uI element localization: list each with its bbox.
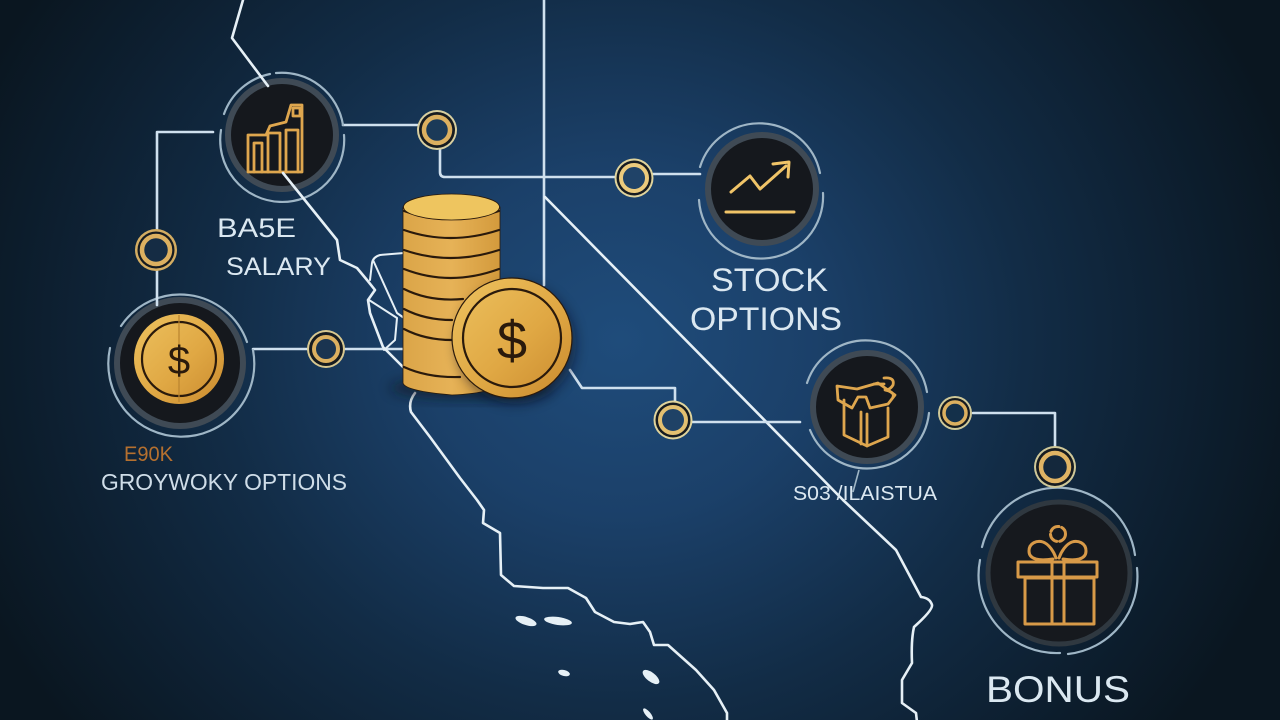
connector: left circle to node bbox=[253, 348, 307, 350]
connector: node to coin stack bbox=[345, 348, 404, 350]
coast line lower bbox=[410, 393, 727, 720]
label: small orange value: E90K bbox=[124, 443, 173, 466]
node bbox=[307, 330, 345, 368]
panel: growth options circle bbox=[108, 294, 254, 437]
panel: sign-on circle bbox=[807, 340, 929, 492]
top border line bbox=[232, 0, 268, 86]
node bbox=[417, 110, 457, 150]
node bbox=[1034, 446, 1076, 488]
node bbox=[614, 158, 654, 198]
front coin bbox=[452, 278, 572, 398]
connector: salary to node bbox=[343, 124, 418, 126]
coast islands bbox=[514, 614, 662, 720]
map outline and connector lines bbox=[157, 0, 1055, 720]
label: garbled sign-on: S03 /ILAISTUA bbox=[793, 483, 938, 505]
connector: coin to lower node bbox=[570, 370, 675, 402]
icon: open box bbox=[837, 378, 895, 446]
front coin: $ bbox=[497, 311, 527, 371]
node bbox=[654, 400, 692, 440]
connector nodes bbox=[135, 110, 1076, 488]
label: stock: STOCK bbox=[711, 262, 828, 298]
node bbox=[135, 229, 177, 271]
icon: dollar coin: $ bbox=[168, 339, 190, 383]
label: base: BA5E bbox=[217, 213, 296, 243]
panel: bonus circle bbox=[979, 488, 1137, 654]
connector: lower node to circle bbox=[692, 421, 800, 423]
icon: bar chart bbox=[248, 105, 302, 172]
vertical trunk line bbox=[543, 0, 545, 285]
node bbox=[938, 396, 972, 430]
diagonal border line bbox=[545, 197, 932, 720]
bay detail lines bbox=[369, 253, 404, 350]
front coin shadow bbox=[456, 284, 576, 404]
connector: node to stock node bbox=[440, 150, 615, 177]
label: bonus: BONUS bbox=[986, 669, 1130, 710]
connector: stock node to stock circle bbox=[653, 173, 700, 175]
stack bands bbox=[404, 211, 499, 377]
coin stack with front coin bbox=[390, 194, 576, 404]
panel: base salary circle bbox=[220, 73, 344, 202]
overlay lines crossing circles bbox=[157, 0, 404, 368]
connector: left node to left circle bbox=[156, 270, 158, 305]
icon: rising trend arrow bbox=[726, 162, 794, 212]
coast line upper bbox=[283, 173, 404, 368]
stack top bbox=[404, 194, 500, 220]
connector: right node to bonus node bbox=[973, 413, 1055, 447]
connector: salary to left node bbox=[157, 132, 213, 230]
label: salary: SALARY bbox=[226, 253, 331, 281]
label: growth options: GROYWOKY OPTIONS bbox=[101, 469, 347, 495]
stem line bbox=[853, 470, 859, 492]
stack body bbox=[403, 207, 500, 395]
panel: stock options circle bbox=[699, 123, 823, 259]
label: options: OPTIONS bbox=[690, 301, 842, 337]
glow shadow bbox=[390, 376, 550, 400]
icon: dollar coin bbox=[134, 314, 224, 404]
icon: gift box bbox=[1018, 526, 1097, 624]
